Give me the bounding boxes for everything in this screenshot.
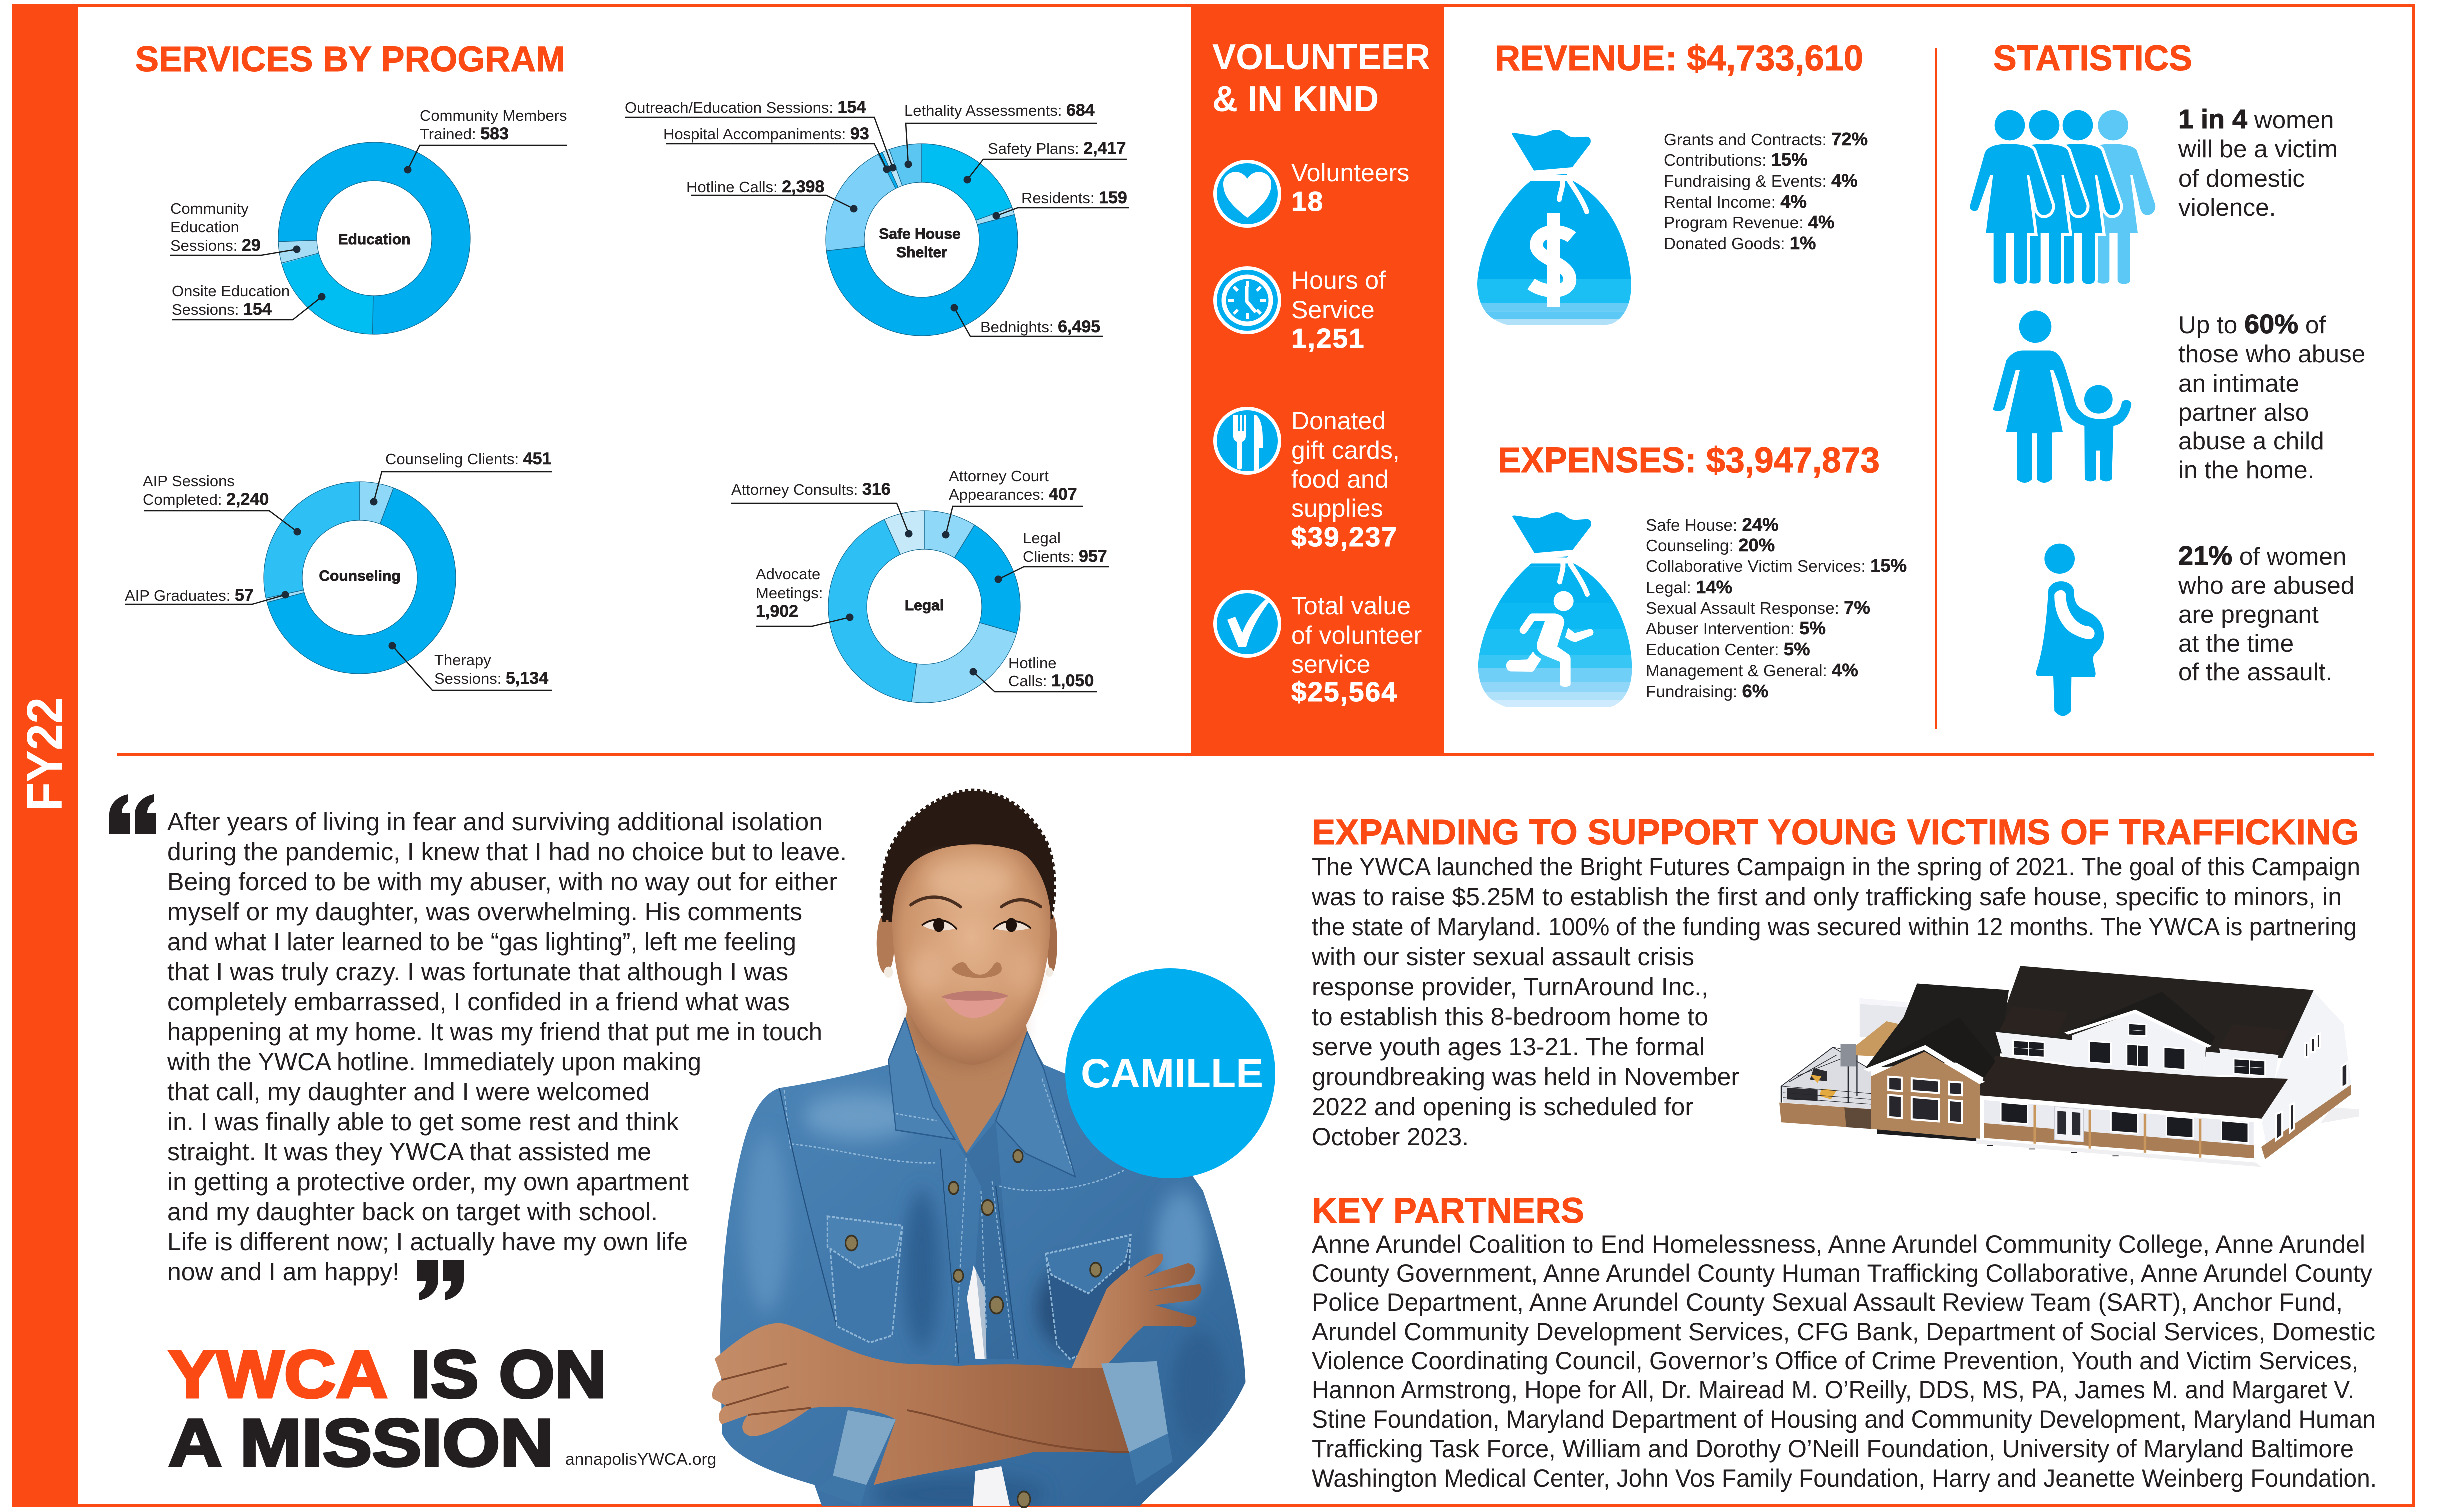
revenue breakdown: Contributions: 15% xyxy=(1664,149,1808,170)
website: annapolisYWCA.org xyxy=(566,1450,716,1469)
total value of volunteer service: of volunteer xyxy=(1292,621,1422,649)
key partners list: Anne Arundel Coalition to End Homelessness, Anne Arundel Community College, Anne Arundel xyxy=(1312,1230,2366,1258)
total value of volunteer service xyxy=(1292,592,1422,707)
testimonial text: with the YWCA hotline. Immediately upon making xyxy=(167,1048,702,1076)
hours of service: 1,251 xyxy=(1292,323,1366,354)
right hand over arm xyxy=(1072,1254,1202,1371)
key partners list: Arundel Community Development Services, CFG Bank, Department of Social Services, Domestic xyxy=(1312,1318,2376,1346)
FY22 side band xyxy=(12,4,78,1507)
expenses breakdown xyxy=(1646,514,1907,701)
statistic: 60 percent: Up to 60% of xyxy=(2178,309,2326,339)
label: therapy sessions xyxy=(389,642,552,690)
statistic: 1 in 4 women: of domestic xyxy=(2178,165,2305,192)
testimonial text xyxy=(167,808,847,1286)
label: onsite education sessions: Sessions: 154 xyxy=(172,300,272,319)
key partners list: Trafficking Task Force, William and Dorothy O’Neill Foundation, University of Maryland Baltimore xyxy=(1312,1435,2354,1463)
key partners list xyxy=(1312,1230,2377,1492)
revenue breakdown: Grants and Contracts: 72% xyxy=(1664,129,1868,149)
label: AIP sessions completed xyxy=(143,472,301,536)
icon: clock xyxy=(1214,266,1282,334)
label: attorney consults: Attorney Consults: 316 xyxy=(732,480,891,499)
label: counseling clients: Counseling Clients: 451 xyxy=(386,449,552,468)
testimonial text: myself or my daughter, was overwhelming. His comments xyxy=(168,898,802,926)
expenses breakdown: Education Center: 5% xyxy=(1646,639,1810,659)
label: AIP graduates: AIP Graduates: 57 xyxy=(125,586,254,605)
key partners list: Violence Coordinating Council, Governor’s Office of Crime Prevention, Youth and Victim Services, xyxy=(1312,1347,2358,1375)
key partners list: Stine Foundation, Maryland Department of Housing and Community Development, Maryland Human xyxy=(1312,1405,2376,1433)
label: community education sessions: Sessions: 29 xyxy=(170,236,261,255)
trafficking text block: the state of Maryland. 100% of the funding was secured within 12 months. The YWCA is partnering xyxy=(1312,913,2357,941)
donut chart: Legal: Legal xyxy=(905,597,944,614)
label: AIP sessions completed: Completed: 2,240 xyxy=(143,490,269,509)
label: community education sessions: Education xyxy=(170,218,240,236)
donated goods: food and xyxy=(1292,465,1389,493)
upper walls xyxy=(1996,1012,2278,1080)
statistic: 21 percent xyxy=(2178,541,2354,686)
donut chart: Safe House Shelter xyxy=(625,98,1130,343)
eyes xyxy=(922,921,1030,931)
label: AIP sessions completed: AIP Sessions xyxy=(143,472,235,490)
volunteers count xyxy=(1292,159,1410,217)
label: outreach/education sessions xyxy=(625,98,897,172)
icon: check mark xyxy=(1214,590,1282,658)
tagline: YWCA is on a mission xyxy=(168,1337,607,1480)
testimonial text: in getting a protective order, my own apartment xyxy=(168,1168,689,1196)
photo illustration: woman with crossed arms in denim shirt xyxy=(712,791,1246,1512)
pearl earrings xyxy=(884,967,893,978)
key partners list: Police Department, Anne Arundel County Sexual Assault Review Team (SART), Anchor Fund, xyxy=(1312,1288,2343,1316)
illustration: safe house rendering xyxy=(1780,966,2359,1167)
trafficking text block: October 2023. xyxy=(1312,1123,1469,1151)
testimonial text: in. I was finally able to get some rest and think xyxy=(168,1108,680,1136)
donut chart: Safe House Shelter: Shelter xyxy=(896,244,948,261)
label: safety plans: Safety Plans: 2,417 xyxy=(988,139,1126,158)
neck and chest xyxy=(906,985,1028,1153)
label: attorney court appearances xyxy=(942,467,1083,539)
icon: pregnant woman xyxy=(2036,544,2104,716)
statistic: 21 percent: are pregnant xyxy=(2178,601,2319,628)
label: hospital accompaniments: Hospital Accompaniments: 93 xyxy=(664,124,870,143)
expenses breakdown: Sexual Assault Response: 7% xyxy=(1646,597,1870,618)
label: outreach/education sessions: Outreach/Education Sessions: 154 xyxy=(625,98,866,117)
lips xyxy=(941,991,1009,1001)
key partners list: County Government, Anne Arundel County Human Trafficking Collaborative, Anne Arundel County xyxy=(1312,1259,2372,1287)
label: onsite education sessions: Onsite Education xyxy=(172,282,290,300)
ears xyxy=(877,913,894,974)
donut chart: Safe House Shelter: Safe House xyxy=(879,226,961,242)
statistic: 60 percent xyxy=(2178,309,2366,484)
porch roof xyxy=(1974,1056,2288,1119)
trafficking text block: groundbreaking was held in November xyxy=(1312,1063,1740,1091)
testimonial text: now and I am happy! xyxy=(168,1258,400,1286)
testimonial text: that I was truly crazy. I was fortunate that although I was xyxy=(168,958,788,986)
trafficking text block: with our sister sexual assault crisis xyxy=(1312,943,1694,971)
label: counseling clients xyxy=(370,449,552,506)
label: advocate meetings: Advocate xyxy=(756,565,820,583)
name badge: Camille xyxy=(1066,968,1276,1178)
entry door xyxy=(2055,1107,2084,1142)
statistic: 60 percent: in the home. xyxy=(2178,456,2314,484)
label: legal clients: Legal xyxy=(1023,529,1061,547)
label: therapy sessions: Sessions: 5,134 xyxy=(434,669,548,688)
testimonial text: Life is different now; I actually have my own life xyxy=(168,1228,688,1256)
label: community education sessions xyxy=(170,200,301,255)
panel heading: & IN KIND xyxy=(1212,79,1379,119)
statistic: 21 percent: 21% of women xyxy=(2178,541,2346,571)
label: hotline calls xyxy=(970,654,1098,692)
heading: expenses: EXPENSES: $3,947,873 xyxy=(1498,441,1880,480)
centre gable roof xyxy=(2066,992,2216,1047)
hours of service xyxy=(1292,266,1386,354)
icon: fork and knife xyxy=(1214,407,1282,475)
donut chart: Education xyxy=(170,107,568,334)
heading: key partners: KEY PARTNERS xyxy=(1312,1191,1584,1231)
expenses breakdown: Abuser Intervention: 5% xyxy=(1646,618,1826,638)
icon: closing quote mark xyxy=(418,1260,464,1300)
donut chart: Counseling xyxy=(125,449,552,690)
label: hospital accompaniments xyxy=(664,124,891,173)
donated goods: gift cards, xyxy=(1292,436,1400,464)
stitching xyxy=(784,1079,1129,1364)
donated goods: $39,237 xyxy=(1292,521,1398,552)
label: residents xyxy=(993,188,1130,220)
face xyxy=(892,844,1051,1065)
front stone gable xyxy=(1877,1129,1976,1141)
label: legal clients: Clients: 957 xyxy=(1023,547,1108,566)
statistic: 60 percent: those who abuse xyxy=(2178,340,2366,368)
expenses breakdown: Safe House: 24% xyxy=(1646,514,1779,535)
revenue breakdown: Donated Goods: 1% xyxy=(1664,233,1816,253)
icon: woman and child xyxy=(1993,310,2132,483)
porch wall xyxy=(1984,1100,2254,1145)
label: community members trained: Trained: 583 xyxy=(420,124,509,143)
statistic: 1 in 4 women: violence. xyxy=(2178,194,2276,221)
testimonial text: during the pandemic, I knew that I had no choice but to leave. xyxy=(168,838,847,866)
label: therapy sessions: Therapy xyxy=(434,651,492,669)
white top xyxy=(967,1265,1010,1506)
white side wall xyxy=(2262,991,2352,1147)
expenses breakdown: Fundraising: 6% xyxy=(1646,681,1768,701)
tagline: YWCA is on a mission: A MISSION xyxy=(168,1406,554,1480)
donut chart: Counseling: Counseling xyxy=(319,568,401,584)
trafficking text block: 2022 and opening is scheduled for xyxy=(1312,1093,1694,1121)
testimonial text: After years of living in fear and surviving additional isolation xyxy=(168,808,823,836)
donated goods xyxy=(1292,407,1400,552)
testimonial text: that call, my daughter and I were welcomed xyxy=(168,1078,650,1106)
rolled cuffs xyxy=(833,1361,1168,1485)
hours of service: Hours of xyxy=(1292,266,1386,294)
testimonial text: straight. It was they YWCA that assisted me xyxy=(168,1138,652,1166)
tagline: YWCA is on a mission: YWCA xyxy=(168,1337,388,1412)
panel: volunteer and in kind xyxy=(1192,4,1444,756)
panel heading xyxy=(1212,37,1430,119)
trafficking text block xyxy=(1312,853,2360,1151)
key partners list: Washington Medical Center, John Vos Family Foundation, Harry and Jeanette Weinberg Foundation. xyxy=(1312,1464,2377,1492)
icon: heart xyxy=(1214,160,1282,228)
heading: revenue: REVENUE: $4,733,610 xyxy=(1495,39,1864,78)
left roof xyxy=(1866,983,2009,1068)
icon: money bag with dollar sign xyxy=(1470,130,1640,326)
upper main roof xyxy=(1996,966,2314,1058)
label: hotline calls: Hotline xyxy=(1008,654,1057,672)
revenue breakdown: Rental Income: 4% xyxy=(1664,191,1807,212)
trafficking text block: response provider, TurnAround Inc., xyxy=(1312,973,1708,1001)
buttons xyxy=(846,1150,1102,1507)
testimonial text: happening at my home. It was my friend that put me in touch xyxy=(168,1018,822,1046)
shirt xyxy=(720,1032,1246,1506)
label: residents: Residents: 159 xyxy=(1022,188,1128,207)
label: community members trained xyxy=(404,107,568,174)
revenue breakdown: Program Revenue: 4% xyxy=(1664,212,1834,232)
heading: services by program: SERVICES BY PROGRAM xyxy=(136,40,566,79)
expenses breakdown: Collaborative Victim Services: 15% xyxy=(1646,555,1907,576)
expenses breakdown: Management & General: 4% xyxy=(1646,660,1858,680)
icon: opening quote mark xyxy=(110,794,156,834)
statistic: 1 in 4 women: will be a victim xyxy=(2178,135,2338,163)
panel heading: VOLUNTEER xyxy=(1212,37,1430,77)
testimonial text: and what I later learned to be “gas lighting”, left me feeling xyxy=(168,928,796,956)
label: safety plans xyxy=(964,139,1128,184)
label: lethality assessments: Lethality Assessments: 684 xyxy=(904,101,1095,120)
deck xyxy=(1782,1048,1872,1109)
label: advocate meetings: Meetings: xyxy=(756,584,823,602)
shirt collar xyxy=(888,1018,1076,1177)
trafficking text block: to establish this 8-bedroom home to xyxy=(1312,1003,1708,1031)
donut chart: Legal xyxy=(732,467,1110,712)
statistic: 60 percent: an intimate xyxy=(2178,370,2300,397)
FY22 side band: FY22 xyxy=(17,697,73,811)
label: onsite education sessions xyxy=(172,282,326,320)
name badge: Camille: CAMILLE xyxy=(1081,1051,1264,1096)
label: advocate meetings: 1,902 xyxy=(756,602,798,621)
total value of volunteer service: Total value xyxy=(1292,592,1411,620)
left chest pocket xyxy=(828,1216,903,1342)
label: legal clients xyxy=(995,529,1110,583)
statistic: 21 percent: of the assault. xyxy=(2178,658,2332,686)
heading: expanding to support: EXPANDING TO SUPPORT YOUNG VICTIMS OF TRAFFICKING xyxy=(1312,813,2359,852)
trafficking text block: was to raise $5.25M to establish the first and only trafficking safe house, specific to minors, in xyxy=(1312,883,2342,911)
hours of service: Service xyxy=(1292,296,1375,324)
volunteers count: Volunteers xyxy=(1292,159,1410,187)
nose xyxy=(952,962,1002,978)
key partners list: Hannon Armstrong, Hope for All, Dr. Mairead M. O’Reilly, DDS, MS, PA, James M. and Margaret V. xyxy=(1312,1376,2354,1404)
label: bednights xyxy=(951,304,1104,336)
label: attorney consults xyxy=(732,480,913,538)
revenue breakdown: Fundraising & Events: 4% xyxy=(1664,170,1858,191)
label: hotline calls: Calls: 1,050 xyxy=(1008,671,1094,690)
testimonial text: and my daughter back on target with school. xyxy=(168,1198,658,1226)
label: community members trained: Community Members xyxy=(420,107,568,124)
expenses breakdown: Legal: 14% xyxy=(1646,577,1732,597)
statistic: 1 in 4 women xyxy=(2178,104,2338,221)
donut chart: Education: Education xyxy=(338,231,411,248)
statistic: 1 in 4 women: 1 in 4 women xyxy=(2178,104,2334,134)
trafficking text block: serve youth ages 13-21. The formal xyxy=(1312,1033,1705,1061)
statistic: 21 percent: at the time xyxy=(2178,630,2294,657)
total value of volunteer service: $25,564 xyxy=(1292,676,1398,707)
right chest pocket xyxy=(1046,1235,1131,1359)
expenses breakdown: Counseling: 20% xyxy=(1646,535,1775,555)
statistic: 60 percent: partner also xyxy=(2178,399,2309,426)
label: lethality assessments xyxy=(904,101,1098,168)
label: bednights: Bednights: 6,495 xyxy=(980,317,1100,336)
label: hotline calls xyxy=(686,177,858,213)
statistic: 21 percent: who are abused xyxy=(2178,572,2354,599)
testimonial text: completely embarrassed, I confided in a friend what was xyxy=(168,988,790,1016)
dormer roofs xyxy=(2000,1006,2290,1053)
volunteers count: 18 xyxy=(1292,186,1324,217)
label: advocate meetings xyxy=(756,565,854,626)
label: attorney court appearances: Attorney Court xyxy=(949,467,1049,485)
icon: four women xyxy=(1970,110,2156,284)
pergola xyxy=(1848,1021,1898,1057)
label: hotline calls: Hotline Calls: 2,398 xyxy=(686,177,824,196)
donated goods: Donated xyxy=(1292,407,1386,435)
donated goods: supplies xyxy=(1292,494,1383,522)
total value of volunteer service: service xyxy=(1292,650,1370,678)
icon: money bag with runner xyxy=(1471,512,1641,708)
eyebrows xyxy=(911,897,1041,907)
label: community education sessions: Community xyxy=(170,200,249,217)
upper windows xyxy=(2014,1023,2266,1076)
heading: statistics: STATISTICS xyxy=(1994,39,2192,78)
hair xyxy=(882,791,1054,920)
revenue breakdown xyxy=(1664,129,1868,253)
trafficking text block: The YWCA launched the Bright Futures Campaign in the spring of 2021. The goal of this Campaign xyxy=(1312,853,2360,881)
tagline: YWCA is on a mission: IS ON xyxy=(411,1337,607,1412)
porch posts xyxy=(2035,1105,2200,1158)
statistic: 60 percent: abuse a child xyxy=(2178,427,2324,455)
forearm and hand in front xyxy=(712,1323,1133,1485)
testimonial text: Being forced to be with my abuser, with no way out for either xyxy=(168,868,838,896)
label: attorney court appearances: Appearances: 407 xyxy=(949,485,1078,504)
